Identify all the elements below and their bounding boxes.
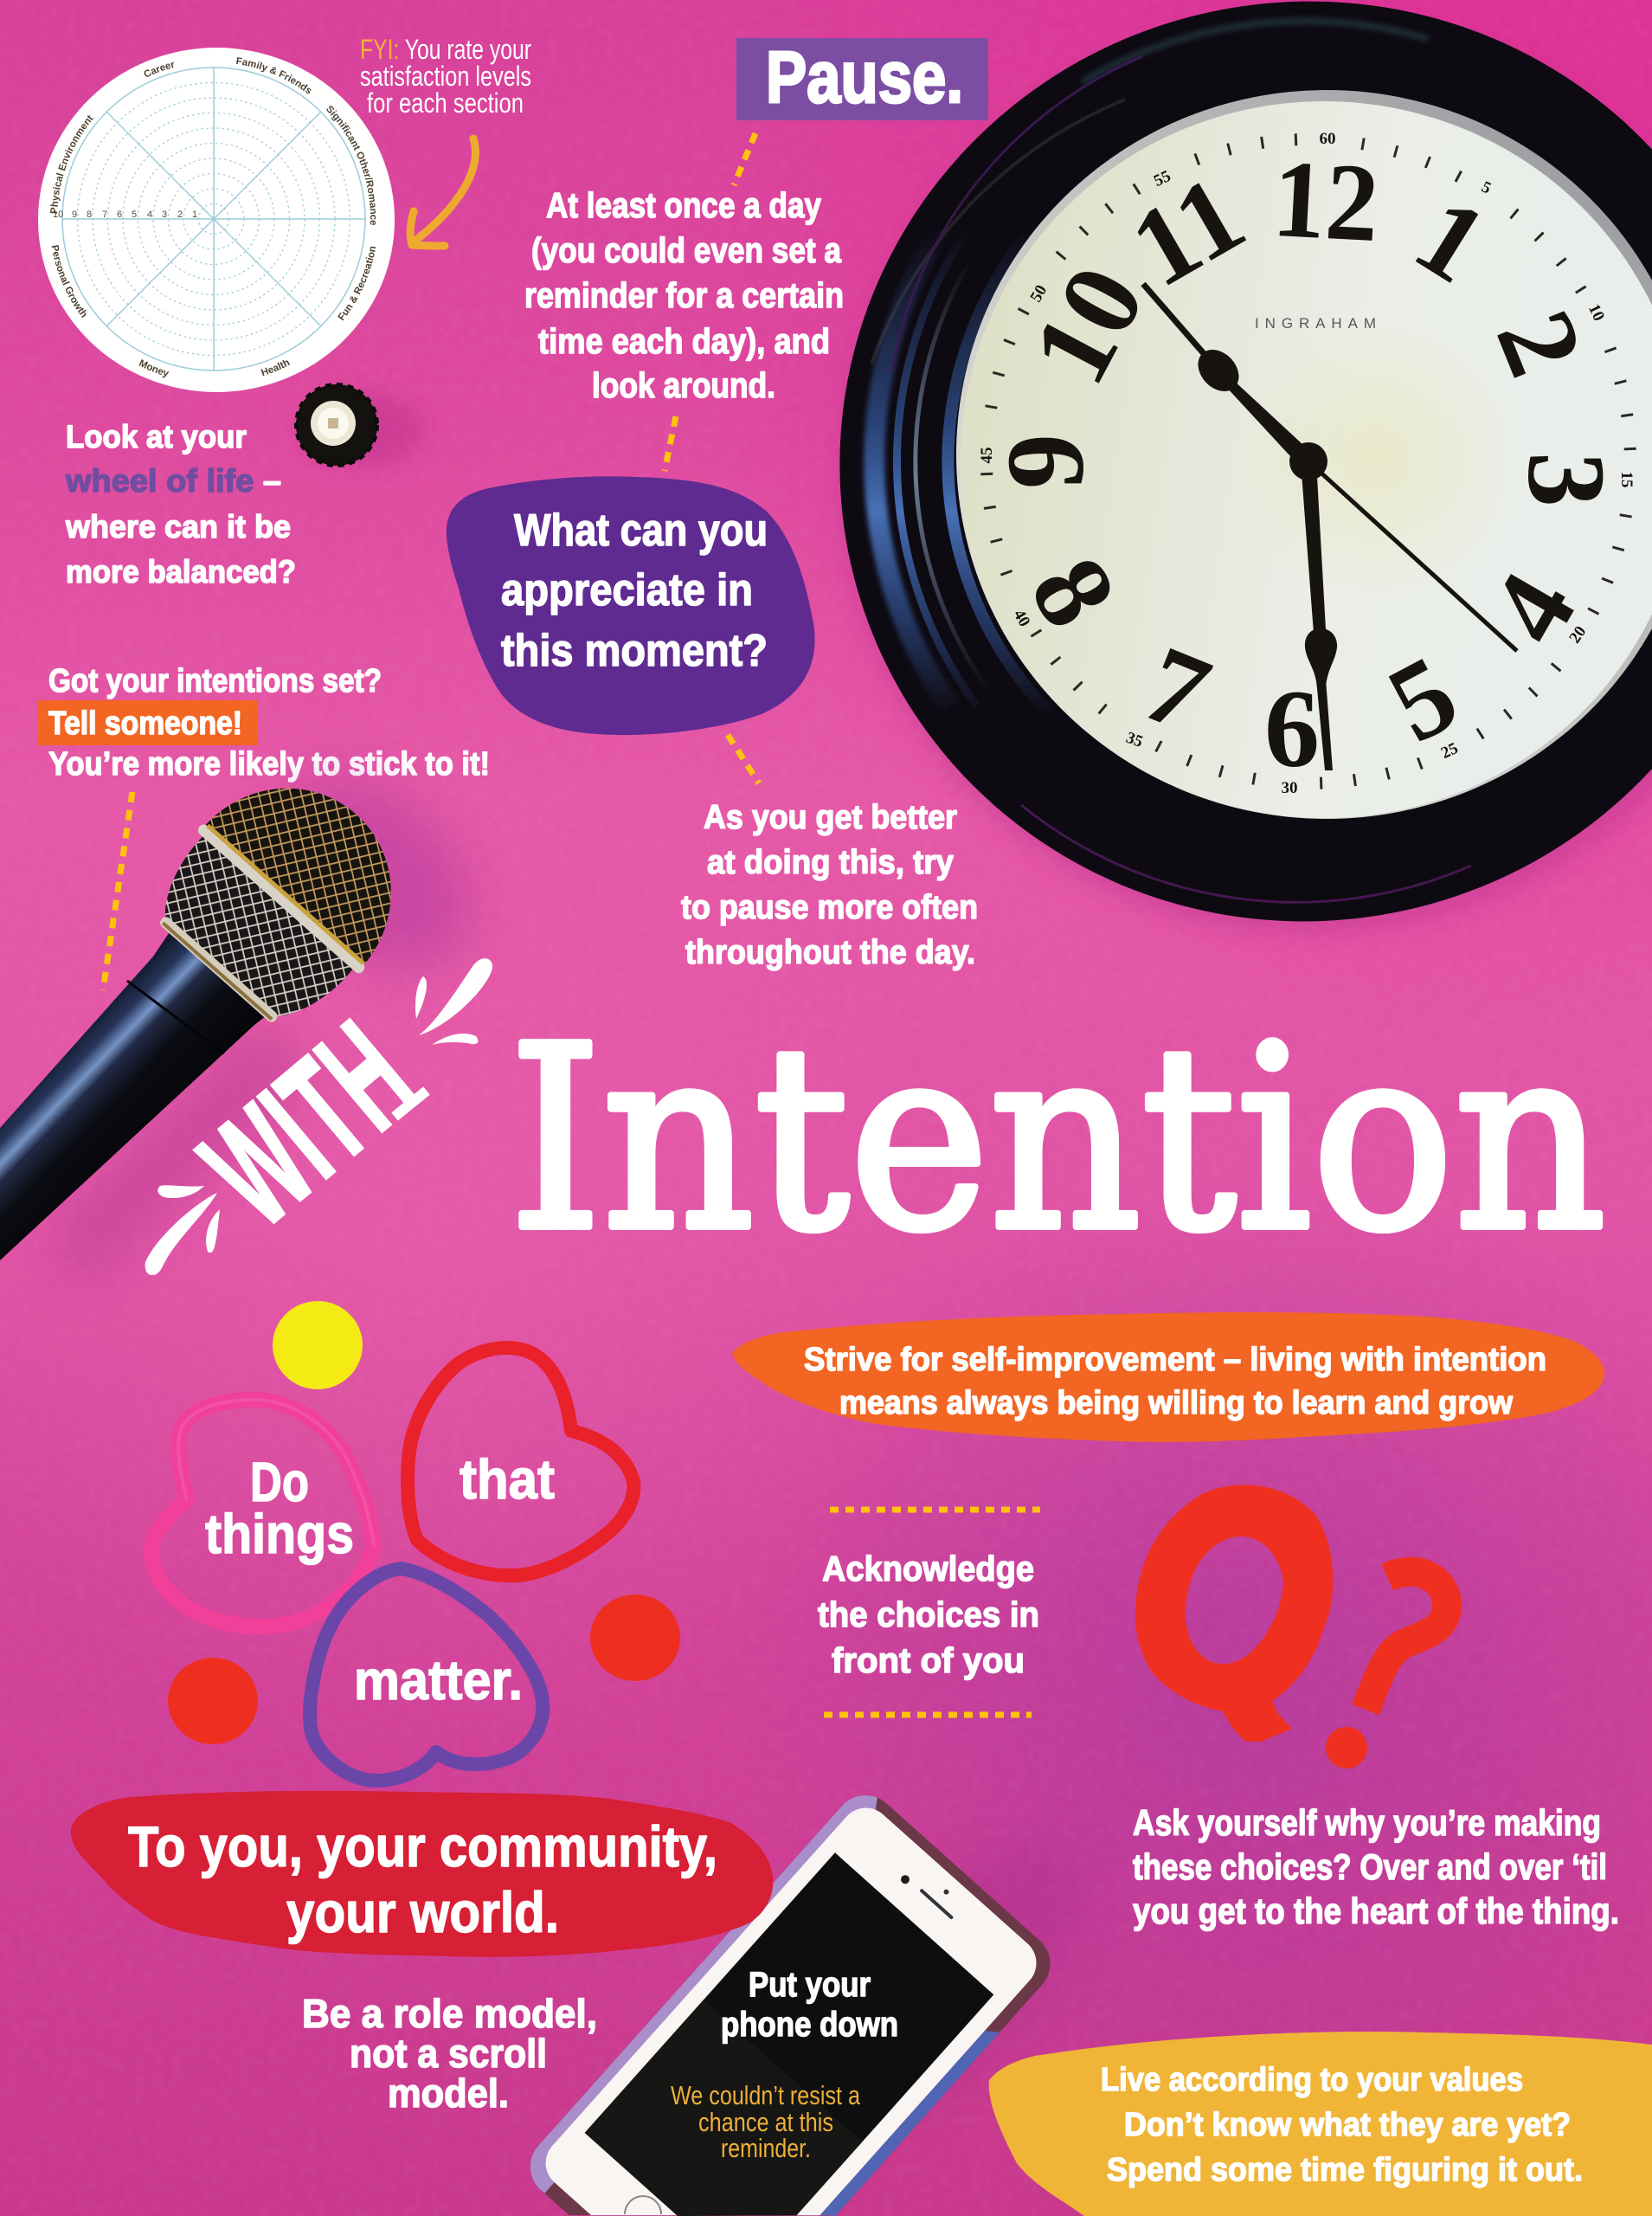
icon: yellow disc — [273, 1301, 363, 1389]
clock minute numbers: 30 — [1281, 779, 1298, 797]
text: be a role model: Be a role model, — [302, 1991, 597, 2036]
wheel section labels: Fun & Recreation — [337, 246, 376, 320]
clock minute numbers: 45 — [978, 447, 996, 464]
clock minute ticks — [938, 91, 1652, 832]
text: we couldn't resist: We couldn’t resist a — [671, 2080, 861, 2110]
dotted connector: question to text — [728, 735, 759, 783]
wheel section labels: Physical Environment — [50, 115, 93, 213]
callout: live according to your values: Live according to your values — [1101, 2062, 1523, 2098]
text: tell someone: Got your intentions set? — [48, 663, 382, 699]
wheel scale numbers: 5 — [132, 209, 137, 220]
text: wheel of life prompt: where can it be — [65, 509, 291, 544]
text: we couldn't resist — [671, 2080, 861, 2163]
dotted connector: text to question — [665, 416, 676, 471]
wheel section labels: Family & Friends — [236, 57, 312, 93]
text: at least once a day: At least once a day — [546, 185, 821, 225]
wheel section labels: Significant Other/Romance — [327, 106, 376, 225]
callout: what can you appreciate: this moment? — [501, 626, 768, 676]
text: ask yourself why — [1133, 1802, 1619, 1931]
text: we couldn't resist: chance at this — [698, 2107, 833, 2137]
text: at least once a day: look around. — [592, 365, 775, 405]
wheel section labels — [50, 57, 376, 377]
heading: WITH: WITH — [173, 990, 444, 1257]
clock hands — [1143, 284, 1517, 770]
text: acknowledge the choices — [818, 1510, 1040, 1715]
heading: WITH — [145, 958, 492, 1275]
panel: hearts and discs — [151, 1301, 680, 1781]
arrow: FYI to wheel — [410, 138, 475, 246]
wheel section labels: Money — [138, 359, 170, 377]
wheel scale numbers — [53, 209, 197, 220]
clock hour numerals: 7 — [1128, 622, 1225, 757]
clock hour numerals: 2 — [1473, 294, 1608, 391]
dotted connector: tell someone to microphone — [103, 792, 132, 990]
clock minute numbers: 55 — [1151, 167, 1173, 190]
clock minute numbers: 50 — [1027, 282, 1051, 306]
text: tell someone: Tell someone! — [48, 705, 242, 742]
clock hour numerals: 9 — [984, 434, 1107, 489]
icon: toy wheel — [296, 384, 424, 467]
clock hour numerals: 3 — [1505, 452, 1628, 507]
clock brand: INGRAHAM — [1255, 315, 1376, 332]
callout: what can you appreciate — [447, 476, 815, 735]
wheel section labels: Health — [261, 360, 290, 376]
callout: strive for self-improvement: means always being willing to learn and grow — [839, 1385, 1513, 1421]
callout: to you, your community, your world: To you, your community, — [128, 1814, 717, 1878]
text: tell someone: You’re more likely to stick to it! — [48, 746, 490, 783]
text: as you get better: throughout the day. — [685, 934, 975, 971]
clock hour numerals: 12 — [1270, 137, 1382, 265]
icon: red heart — [408, 1348, 633, 1575]
text: do things that matter — [205, 1448, 555, 1711]
heading: Intention: Intention — [509, 992, 1606, 1286]
text: at least once a day — [524, 185, 844, 405]
text: put your phone down: Put your — [749, 1966, 871, 2004]
text: do things that matter: that — [460, 1448, 555, 1511]
text: FYI note: satisfaction levels — [360, 61, 531, 92]
clock minute numbers: 5 — [1479, 177, 1494, 198]
wheel scale numbers: 1 — [192, 209, 197, 220]
clock hour numerals: 5 — [1369, 631, 1476, 766]
clock hour numerals: 4 — [1466, 553, 1599, 662]
wheel section labels: Personal Growth — [52, 245, 87, 319]
wheel scale numbers: 9 — [72, 209, 77, 220]
text: wheel of life prompt: more balanced? — [66, 554, 296, 589]
text: be a role model: model. — [388, 2071, 509, 2116]
clock minute numbers: 15 — [1617, 471, 1636, 488]
icon: purple heart — [310, 1569, 543, 1781]
clock minute numbers: 25 — [1438, 739, 1461, 763]
text: wheel of life prompt: wheel of life – — [65, 463, 281, 499]
wheel scale numbers: 10 — [53, 209, 63, 220]
icon: red disc right — [590, 1594, 680, 1681]
text: as you get better: to pause more often — [681, 889, 978, 926]
text: at least once a day: reminder for a certain — [524, 275, 844, 315]
clock hour numerals: 8 — [1007, 538, 1141, 647]
wheel scale numbers: 7 — [102, 209, 107, 220]
text: acknowledge the choices: the choices in — [818, 1594, 1039, 1634]
callout: what can you appreciate: What can you — [514, 506, 768, 556]
clock minute numbers: 35 — [1123, 729, 1145, 751]
text: FYI note — [360, 34, 531, 119]
icon: red disc left — [168, 1658, 258, 1744]
text: FYI note: for each section — [367, 87, 524, 119]
icon: pink heart — [151, 1400, 374, 1627]
wheel scale numbers: 6 — [117, 209, 122, 220]
callout: to you, your community, your world: your world. — [286, 1880, 559, 1944]
text: wheel of life prompt: Look at your — [66, 419, 247, 454]
clock minute numbers: 10 — [1585, 301, 1608, 324]
text: FYI note: FYI: You rate your — [360, 34, 531, 65]
text: tell someone — [37, 663, 490, 783]
text: wheel of life prompt — [65, 419, 296, 589]
text: acknowledge the choices: Acknowledge — [822, 1549, 1034, 1588]
callout: strive for self-improvement — [732, 1312, 1604, 1442]
callout: to you, your community, your world — [71, 1791, 773, 1957]
wheel scale numbers: 2 — [177, 209, 183, 220]
text: be a role model — [302, 1991, 597, 2116]
text: be a role model: not a scroll — [350, 2031, 547, 2076]
wheel scale numbers: 4 — [147, 209, 152, 220]
wheel scale numbers: 8 — [87, 209, 92, 220]
text: at least once a day: time each day), and — [538, 321, 830, 361]
callout: live according to your values: Don’t know what they are yet? — [1124, 2107, 1571, 2143]
text: do things that matter: matter. — [354, 1649, 523, 1711]
dotted connector: pause to text — [734, 133, 755, 185]
clock hour numerals: 10 — [1007, 247, 1168, 403]
callout: strive for self-improvement: Strive for self-improvement – living with intention — [804, 1342, 1546, 1378]
text: as you get better: at doing this, try — [707, 844, 954, 881]
clock — [754, 0, 1652, 1008]
icon: phone — [530, 1795, 1126, 2216]
clock minute numbers: 40 — [1010, 607, 1033, 630]
clock hour numerals: 11 — [1111, 151, 1263, 311]
icon: microphone — [0, 741, 508, 1290]
text: put your phone down — [721, 1966, 898, 2044]
callout: live according to your values: Spend some time figuring it out. — [1107, 2152, 1583, 2188]
clock minute numbers: 20 — [1565, 622, 1590, 647]
text: as you get better — [681, 799, 978, 971]
text: at least once a day: (you could even set a — [531, 230, 842, 270]
wheel scale numbers: 3 — [162, 209, 167, 220]
text: we couldn't resist: reminder. — [721, 2133, 811, 2163]
callout: what can you appreciate: appreciate in — [501, 565, 753, 615]
text: acknowledge the choices: front of you — [832, 1640, 1025, 1680]
text: as you get better: As you get better — [704, 799, 957, 836]
clock hour numerals: 6 — [1264, 667, 1320, 790]
text: do things that matter: Do — [250, 1451, 309, 1513]
clock minute numbers — [978, 130, 1636, 797]
panel: wheel of life — [38, 48, 395, 392]
icon: red Q and question mark — [1135, 1485, 1447, 1768]
text: do things that matter: things — [205, 1503, 354, 1565]
callout: live according to your values — [989, 2032, 1652, 2216]
clock hour numerals: 1 — [1395, 173, 1507, 306]
clock hour numerals — [984, 137, 1628, 790]
heading: Pause: Pause. — [766, 36, 963, 118]
wheel section labels: Career — [144, 62, 174, 77]
text: put your phone down: phone down — [721, 2006, 898, 2044]
clock minute numbers: 60 — [1319, 130, 1336, 148]
